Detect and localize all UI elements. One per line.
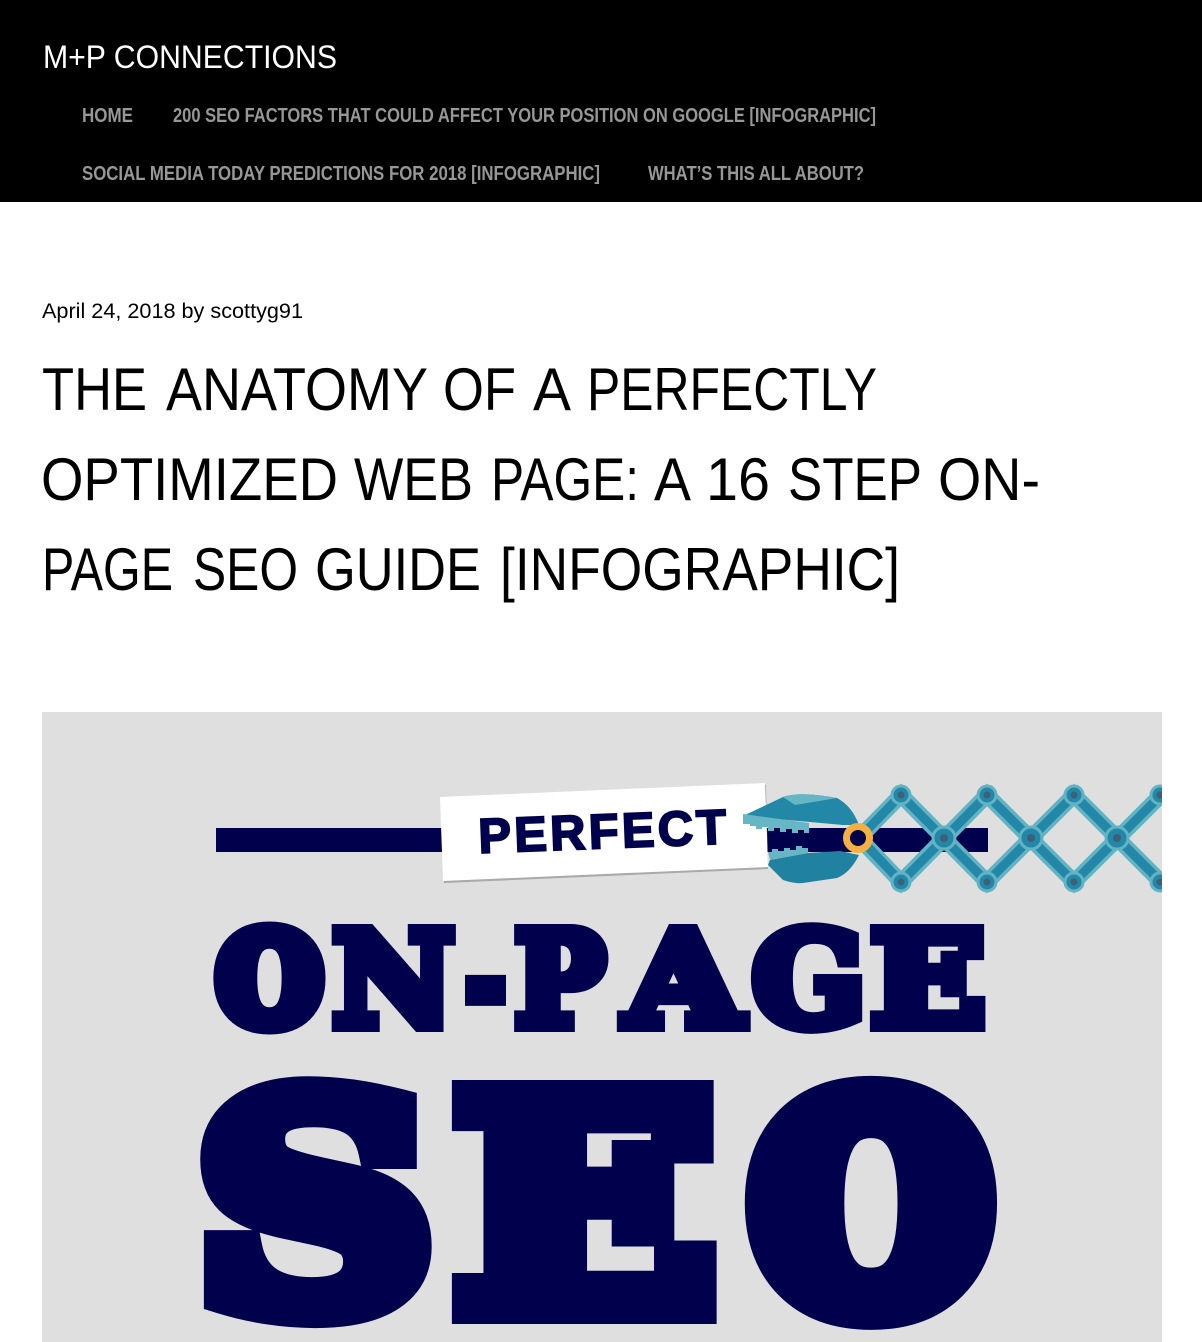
navy bar <box>216 828 988 852</box>
heading: ON-PAGE: G <box>752 905 866 1056</box>
post title: ANATOMY <box>166 356 428 423</box>
icon: clamp jaws <box>743 794 859 883</box>
post title: PAGE <box>42 536 173 603</box>
icon: scissor arm <box>859 786 1169 891</box>
heading: ON-PAGE: P <box>515 905 605 1056</box>
navigation menu: 200 SEO FACTORS THAT COULD AFFECT YOUR POSITION ON GOOGLE [INFOGRAPHIC] <box>173 105 876 127</box>
icon: orange pivot ring <box>846 826 870 850</box>
post title: STEP <box>788 446 922 513</box>
post title: ON- <box>938 446 1040 513</box>
post title: 16 <box>706 446 770 513</box>
header bar <box>0 0 1202 202</box>
navigation menu: WHAT’S THIS ALL ABOUT? <box>648 163 864 185</box>
white banner <box>440 783 768 883</box>
navigation menu: HOME <box>82 105 133 127</box>
post title: [INFOGRAPHIC] <box>500 536 900 603</box>
heading: ON-PAGE: - <box>465 905 506 1056</box>
post title: A <box>533 356 571 423</box>
site title: M+P CONNECTIONS <box>43 39 337 75</box>
infographic image panel <box>42 712 1169 1342</box>
navigation menu <box>82 105 876 185</box>
post title: GUIDE <box>315 536 481 603</box>
heading: ON-PAGE: E <box>871 905 985 1056</box>
post title: A <box>654 446 691 513</box>
post title: WEB <box>354 446 473 513</box>
heading: ON-PAGE: O <box>218 909 321 1053</box>
navigation menu: SOCIAL MEDIA TODAY PREDICTIONS FOR 2018 [INFOGRAPHIC] <box>82 163 600 185</box>
heading: ON-PAGE <box>213 922 986 1034</box>
post title: SEO <box>193 536 298 603</box>
heading: ON-PAGE: A <box>624 905 743 1056</box>
post title: PAGE: <box>491 446 639 513</box>
post title: THE <box>42 356 147 423</box>
post date and author: April 24, 2018 by scottyg91 <box>42 299 303 323</box>
post title: PERFECTLY <box>587 356 877 423</box>
post title: OF <box>443 356 516 423</box>
heading: ON-PAGE: N <box>333 905 454 1056</box>
post title: OPTIMIZED <box>41 446 338 513</box>
banner word: PERFECT <box>477 801 727 864</box>
heading: SEO <box>200 1076 998 1330</box>
post title <box>41 356 1040 603</box>
